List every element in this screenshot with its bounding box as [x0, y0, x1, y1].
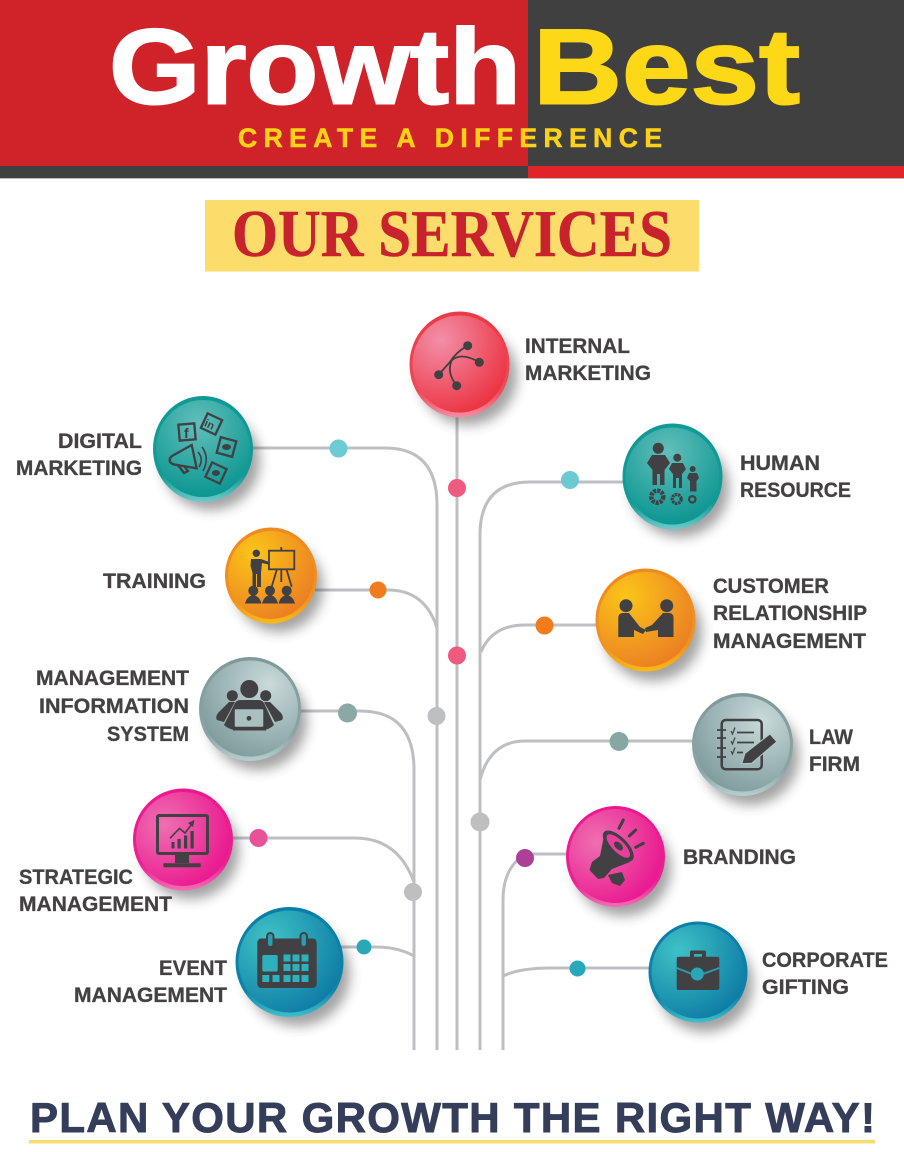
- footer slogan: PLAN YOUR GROWTH THE RIGHT WAY!: [30, 1094, 875, 1141]
- label: digital marketing: [16, 429, 142, 480]
- service: human resource: [622, 424, 729, 537]
- service: corporate gifting: [648, 922, 753, 1032]
- label: branding: BRANDING: [683, 845, 796, 869]
- service: law firm: [692, 693, 799, 805]
- icon: calendar: [257, 933, 317, 988]
- label: human resource: HUMAN: [740, 451, 820, 475]
- label: strategic management: MANAGEMENT: [19, 892, 172, 916]
- label: event management: [74, 956, 227, 1007]
- label: customer relationship management: RELATIONSHIP: [713, 601, 867, 625]
- label: digital marketing: DIGITAL: [58, 429, 142, 453]
- label: law firm: [809, 725, 860, 776]
- service: event management: [236, 907, 350, 1026]
- icon: briefcase: [677, 950, 719, 990]
- icon: megaphone: [590, 820, 643, 886]
- label: event management: MANAGEMENT: [74, 983, 227, 1007]
- label: strategic management: [19, 865, 172, 916]
- label: customer relationship management: MANAGEMENT: [713, 629, 866, 653]
- label: corporate gifting: [762, 948, 888, 999]
- label: management information system: [36, 666, 189, 746]
- label: law firm: LAW: [809, 725, 854, 749]
- label: event management: EVENT: [159, 956, 227, 980]
- label: management information system: INFORMATION: [39, 694, 189, 718]
- service: digital marketing: [153, 396, 260, 510]
- icon: social media megaphone: in: [202, 418, 216, 433]
- service: training: [225, 528, 323, 632]
- icon: social media megaphone: f: [184, 425, 189, 441]
- label: customer relationship management: [713, 574, 867, 653]
- icon: presenter with audience: [245, 547, 295, 604]
- icon: network nodes: [435, 342, 483, 390]
- label: digital marketing: MARKETING: [16, 456, 142, 480]
- label: customer relationship management: CUSTOMER: [713, 574, 829, 598]
- service: customer relationship management: [596, 568, 702, 681]
- label: corporate gifting: GIFTING: [762, 975, 849, 999]
- logo word: Best: Best: [533, 6, 800, 126]
- label: management information system: MANAGEMENT: [36, 666, 189, 690]
- label: internal marketing: [525, 334, 651, 385]
- connector dots: [250, 440, 628, 976]
- connector tree: [233, 410, 695, 1050]
- label: management information system: SYSTEM: [107, 722, 189, 746]
- label: training: TRAINING: [103, 569, 206, 593]
- service: strategic management: [133, 788, 239, 899]
- tagline: CREATE A DIFFERENCE: [238, 123, 662, 153]
- icon: monitor with growth chart: [158, 816, 208, 867]
- icon: team around laptop: [216, 680, 283, 730]
- label: law firm: FIRM: [809, 752, 860, 776]
- logo word: Growth: Growth: [109, 6, 521, 126]
- heading: our services: OUR SERVICES: [232, 197, 672, 271]
- label: corporate gifting: CORPORATE: [762, 948, 888, 972]
- label: human resource: [740, 451, 851, 502]
- icon: social media megaphone: [170, 413, 236, 484]
- service: branding: [566, 806, 671, 916]
- label: human resource: RESOURCE: [740, 478, 851, 502]
- service: management information system: [199, 657, 307, 770]
- label: strategic management: STRATEGIC: [19, 865, 133, 889]
- label: internal marketing: MARKETING: [525, 361, 651, 385]
- header banner: [0, 0, 904, 179]
- icon: three people with gears: [647, 443, 699, 504]
- label: internal marketing: INTERNAL: [525, 334, 630, 358]
- icon: handshake: [618, 599, 674, 637]
- icon: notebook and pen: [717, 720, 777, 769]
- service: internal marketing: [410, 312, 517, 425]
